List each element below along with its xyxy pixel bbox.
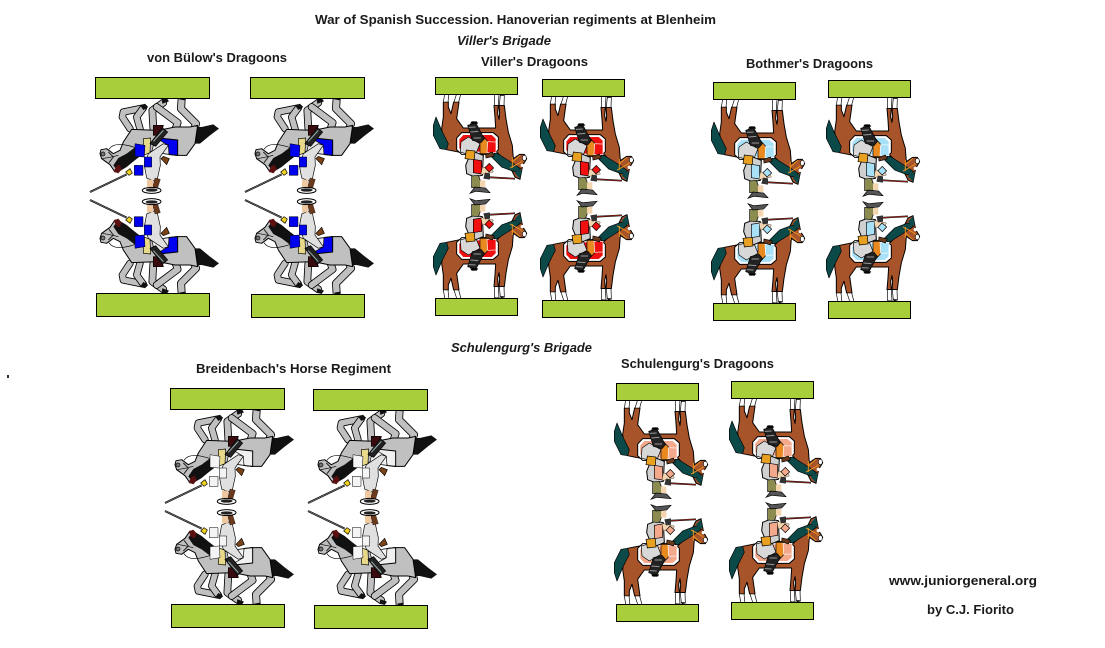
figure: lower dragoon right [245, 199, 374, 300]
bases: Viller's [436, 78, 624, 318]
figure: upper trooper right, mirrored [308, 403, 437, 504]
figure: upper dragoon left, mirrored [90, 92, 219, 193]
figure: upper dragoon left, mirrored [614, 395, 708, 499]
regiment: Breidenbach's Horse Regiment [165, 361, 437, 628]
figure: lower trooper left [165, 510, 294, 611]
figure: upper dragoon right, mirrored [245, 92, 374, 193]
bases: Breidenbach's [170, 388, 428, 628]
brigade heading: Viller's Brigade: Viller's Brigade [457, 33, 552, 48]
title: War of Spanish Succession. Hanoverian regiments at Blenheim [315, 12, 716, 27]
heading: Bothmer's Dragoons: Bothmer's Dragoons [746, 56, 873, 71]
stray mark [7, 375, 9, 378]
figure: upper dragoon right, mirrored [729, 393, 823, 497]
heading: von Bülow's Dragoons: von Bülow's Dragoons [147, 50, 287, 65]
bases: von Bülow's [96, 78, 364, 318]
heading: Viller's Dragoons: Viller's Dragoons [481, 54, 588, 69]
figure: lower dragoon right [826, 202, 920, 306]
figure: upper trooper left, mirrored [165, 403, 294, 504]
figure: upper dragoon left, mirrored [433, 89, 527, 193]
figure: upper dragoon left, mirrored [711, 94, 805, 198]
figure: lower trooper right [308, 510, 437, 611]
heading: Breidenbach's Horse Regiment: Breidenbach's Horse Regiment [196, 361, 392, 376]
figure: upper dragoon right, mirrored [826, 92, 920, 196]
figure: lower dragoon right [540, 201, 634, 305]
credit: website: www.juniorgeneral.org [888, 573, 1037, 588]
regiment: von Bülow's Dragoons [90, 50, 374, 318]
figure: lower dragoon right [729, 503, 823, 607]
brigade heading: Schulengurg's Brigade: Schulengurg's Brigade [451, 340, 593, 355]
regiment: Bothmer's Dragoons [711, 56, 920, 320]
figure: lower dragoon left [433, 199, 527, 303]
figure: upper dragoon right, mirrored [540, 91, 634, 195]
figure: lower dragoon left [614, 505, 708, 609]
bases: Bothmer's [714, 80, 910, 320]
credit: author: by C.J. Fiorito [927, 602, 1014, 617]
regiment: Schulengurg's Dragoons [614, 356, 823, 622]
figure: lower dragoon left [711, 204, 805, 308]
regiment: Viller's Dragoons [433, 54, 634, 318]
heading: Schulengurg's Dragoons: Schulengurg's Dragoons [621, 356, 774, 371]
bases: Schulengurg's [616, 382, 814, 622]
figure: lower dragoon left [90, 199, 219, 300]
